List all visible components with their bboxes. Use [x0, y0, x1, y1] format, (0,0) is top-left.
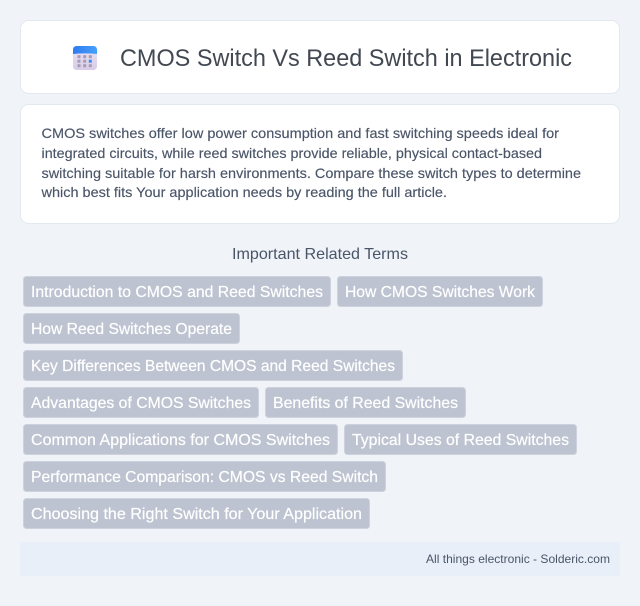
summary text	[40, 125, 581, 200]
tag: choosing the right switch: Choosing the Right Switch for Your Application	[31, 506, 362, 523]
footer bar	[20, 542, 620, 576]
tag: benefits	[266, 388, 466, 418]
tag: common applications: Common Applications for CMOS Switches	[31, 432, 330, 449]
tag: common applications	[24, 424, 338, 454]
summary text: integrated circuits, while reed switches provide reliable, physical contact-based	[42, 145, 542, 161]
title: CMOS Switch Vs Reed Switch in Electronic	[120, 45, 572, 72]
summary text: switching suitable for harsh environments. Compare these switch types to determine	[42, 165, 581, 181]
tag: key differences	[24, 350, 402, 380]
summary text: CMOS switches offer low power consumption and fast switching speeds ideal for	[42, 125, 559, 141]
tag: how CMOS switches work	[338, 276, 542, 306]
tag: how reed switches operate	[24, 314, 240, 344]
tag: performance comparison	[24, 462, 386, 492]
summary text: which best fits Your application needs by reading the full article.	[40, 184, 447, 200]
tag: typical uses: Typical Uses of Reed Switches	[352, 432, 569, 449]
tag: advantages	[24, 388, 258, 418]
tag: advantages: Advantages of CMOS Switches	[31, 395, 251, 412]
icon: calendar grid	[73, 46, 97, 70]
tag: key differences: Key Differences Between CMOS and Reed Switches	[31, 358, 395, 375]
heading: important related terms: Important Related Terms	[232, 246, 408, 263]
panel: summary card	[20, 104, 620, 224]
tag: benefits: Benefits of Reed Switches	[273, 395, 458, 412]
tag: introduction	[24, 276, 330, 306]
tag: choosing the right switch	[24, 498, 370, 528]
footer credit: All things electronic - Solderic.com	[426, 552, 610, 566]
tag: how reed switches operate: How Reed Switches Operate	[31, 321, 232, 338]
tag list	[24, 276, 576, 528]
tag: introduction: Introduction to CMOS and Reed Switches	[31, 284, 323, 301]
tag: typical uses	[344, 424, 576, 454]
tag: how CMOS switches work: How CMOS Switches Work	[345, 284, 536, 301]
tag: performance comparison: Performance Comparison: CMOS vs Reed Switch	[31, 469, 378, 486]
panel: title card	[20, 20, 620, 94]
